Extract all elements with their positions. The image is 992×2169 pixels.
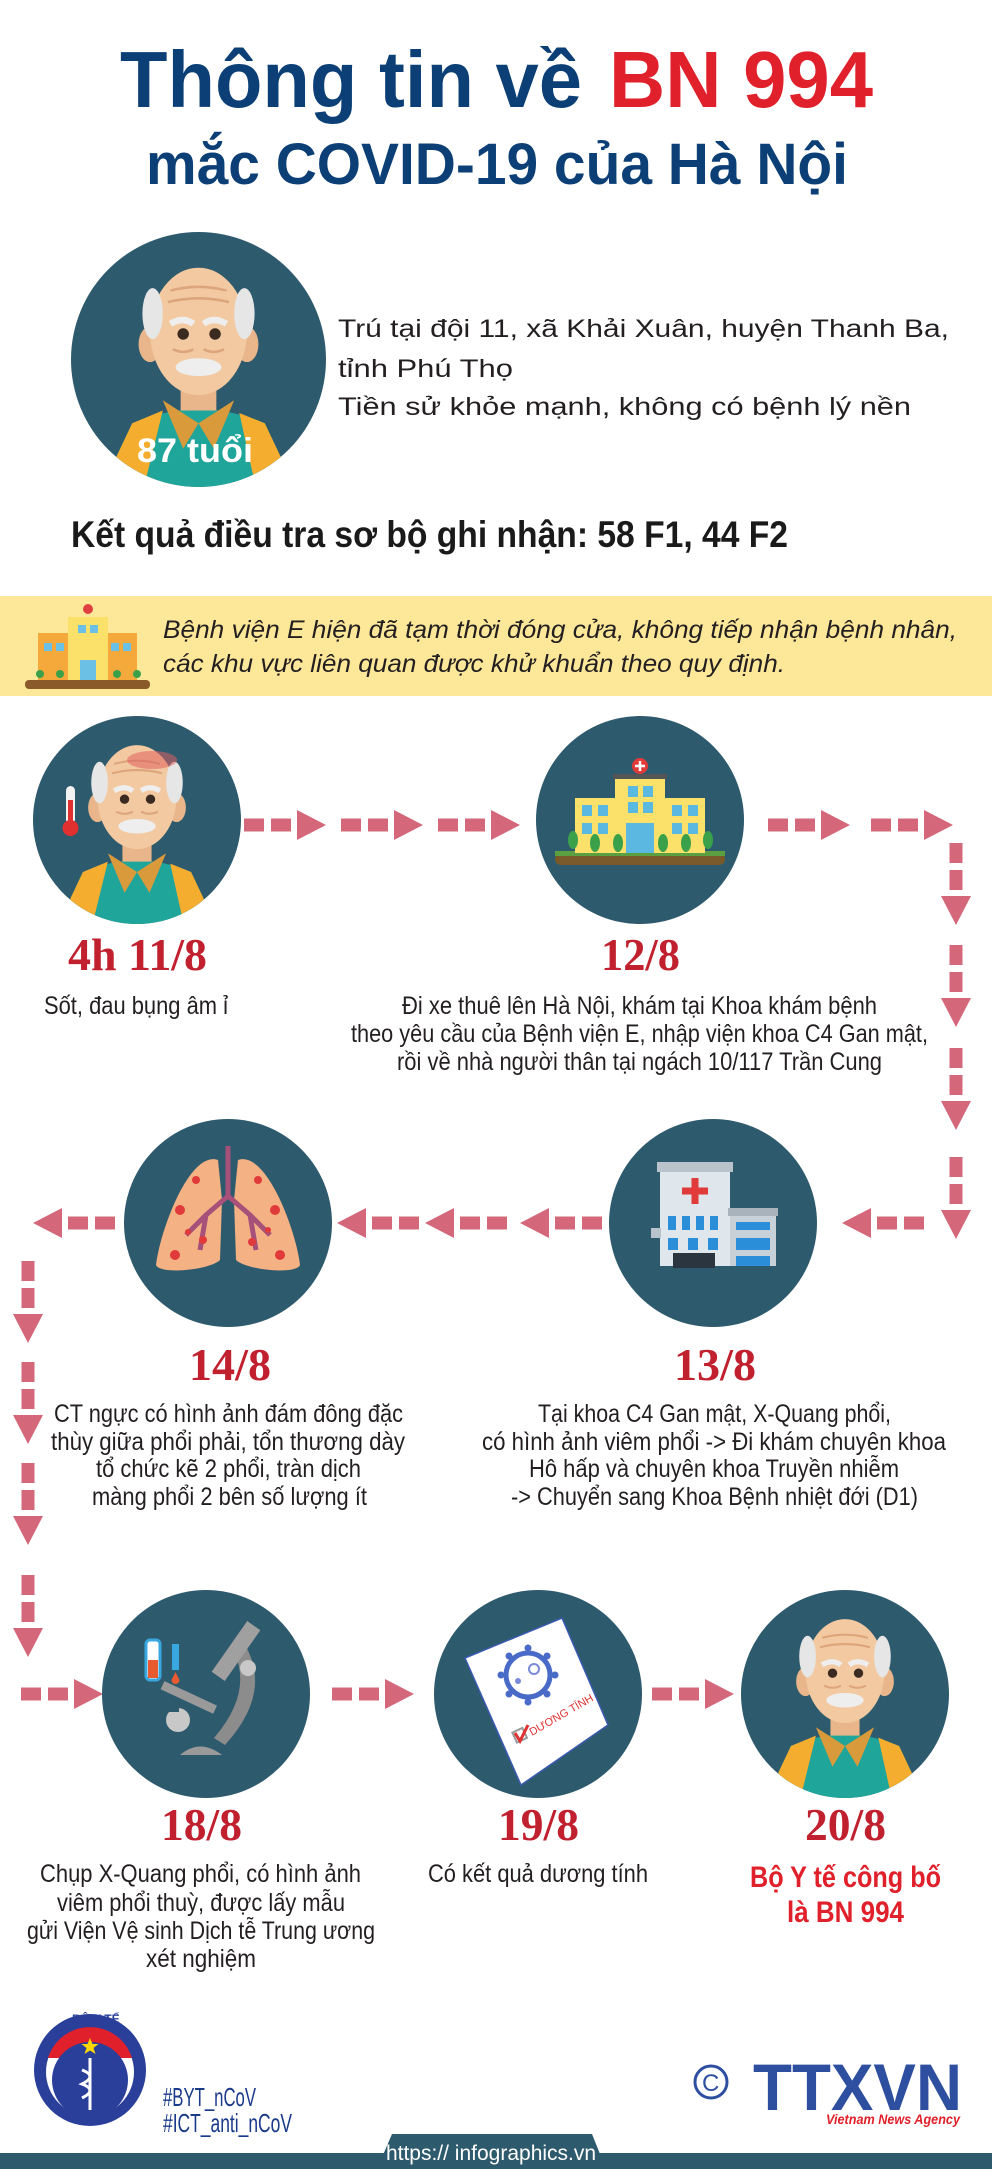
avatar: patient 87 years old: 87 tuổi	[137, 432, 253, 470]
step 4: 14/8	[51, 1119, 405, 1511]
step 6: 19/8: Có kết quả dương tính	[428, 1860, 648, 1888]
step 2: 12/8: rồi về nhà người thân tại ngách 10/117 Trần Cung	[397, 1048, 882, 1076]
step 7: 20/8	[741, 1590, 949, 1929]
icon: positive test paper	[434, 1590, 642, 1798]
logo: Bộ Y tế: BỘ Y TẾ	[72, 2011, 120, 2026]
icon: hospital	[536, 716, 744, 924]
patient info text: Trú tại đội 11, xã Khải Xuân, huyện Thanh Ba,	[338, 315, 949, 343]
step 5: 18/8	[27, 1590, 375, 1973]
logo: Bộ Y tế	[34, 2011, 146, 2126]
title: Thông tin về	[120, 35, 582, 124]
icon: lungs	[124, 1119, 332, 1327]
arrows row 3	[21, 1679, 734, 1709]
footer bar: https:// infographics.vn	[386, 2142, 596, 2165]
step 3: 13/8: Hô hấp và chuyên khoa Truyền nhiễm	[529, 1454, 899, 1483]
title: mắc COVID-19 của Hà Nội	[146, 132, 848, 197]
step 4: 14/8: màng phổi 2 bên số lượng ít	[92, 1483, 367, 1511]
step 2: 12/8: Đi xe thuê lên Hà Nội, khám tại Khoa khám bệnh	[402, 992, 877, 1020]
logo: TTXVN: C	[702, 2070, 719, 2097]
step 3: 13/8: Tại khoa C4 Gan mật, X-Quang phổi,	[538, 1400, 891, 1428]
icon: old man	[741, 1590, 949, 1803]
yellow notice band	[0, 596, 992, 696]
title: BN 994	[609, 35, 873, 124]
step 1: 4h 11/8: Sốt, đau bụng âm ỉ	[44, 992, 228, 1020]
patient info text	[338, 315, 949, 421]
step 4: 14/8: tổ chức kẽ 2 phổi, tràn dịch	[96, 1455, 361, 1483]
step 5: 18/8: gửi Viện Vệ sinh Dịch tễ Trung ương	[27, 1916, 375, 1945]
step 4: 14/8: thùy giữa phổi phải, tổn thương dày	[51, 1428, 405, 1456]
step 5: 18/8: viêm phổi thuỳ, được lấy mẫu	[57, 1888, 345, 1917]
step 7: 20/8: là BN 994	[787, 1896, 904, 1929]
logo: TTXVN: TTXVN	[753, 2050, 962, 2124]
icon: sick old man with thermometer	[33, 716, 241, 929]
avatar: patient 87 years old	[71, 232, 326, 493]
title	[120, 35, 873, 197]
step 2: 12/8	[351, 716, 928, 1076]
icon: hospital small	[25, 604, 150, 689]
hashtags	[163, 2082, 292, 2138]
step 2: 12/8: 12/8	[601, 929, 680, 980]
step 4: 14/8: 14/8	[189, 1339, 271, 1390]
arrows row 2	[13, 1208, 924, 1657]
step 4: 14/8: CT ngực có hình ảnh đám đông đặc	[54, 1400, 403, 1428]
step 1: 4h 11/8	[33, 716, 241, 1020]
yellow notice band: Bệnh viện E hiện đã tạm thời đóng cửa, không tiếp nhận bệnh nhân,	[163, 616, 957, 644]
step 7: 20/8: Bộ Y tế công bố	[750, 1861, 941, 1894]
hashtags: #BYT_nCoV	[163, 2082, 256, 2112]
step 6: 19/8	[428, 1590, 648, 1888]
step 1: 4h 11/8: 4h 11/8	[68, 929, 207, 980]
footer bar	[0, 2134, 992, 2169]
hashtags: #ICT_anti_nCoV	[163, 2108, 292, 2138]
arrows row 1	[244, 810, 971, 1239]
yellow notice band: các khu vực liên quan được khử khuẩn theo quy định.	[163, 650, 785, 678]
logo: TTXVN: Vietnam News Agency	[826, 2111, 961, 2127]
patient info text: Tiền sử khỏe mạnh, không có bệnh lý nền	[338, 393, 911, 421]
step 7: 20/8: 20/8	[805, 1799, 886, 1850]
step 3: 13/8	[482, 1119, 946, 1511]
investigation result: Kết quả điều tra sơ bộ ghi nhận: 58 F1, 44 F2	[71, 514, 788, 555]
icon: hospital building	[609, 1119, 817, 1327]
step 3: 13/8: 13/8	[674, 1339, 756, 1390]
step 3: 13/8: -> Chuyển sang Khoa Bệnh nhiệt đới (D1)	[511, 1483, 918, 1511]
step 5: 18/8: xét nghiệm	[146, 1945, 256, 1973]
icon: microscope and test tubes	[102, 1590, 310, 1798]
patient info text: tỉnh Phú Thọ	[338, 355, 513, 383]
step 3: 13/8: có hình ảnh viêm phổi -> Đi khám chuyên khoa	[482, 1428, 946, 1456]
icon: positive test paper: DƯƠNG TÍNH	[527, 1691, 596, 1739]
step 5: 18/8: 18/8	[161, 1799, 242, 1850]
step 6: 19/8: 19/8	[498, 1799, 579, 1850]
step 5: 18/8: Chụp X-Quang phổi, có hình ảnh	[40, 1860, 361, 1888]
